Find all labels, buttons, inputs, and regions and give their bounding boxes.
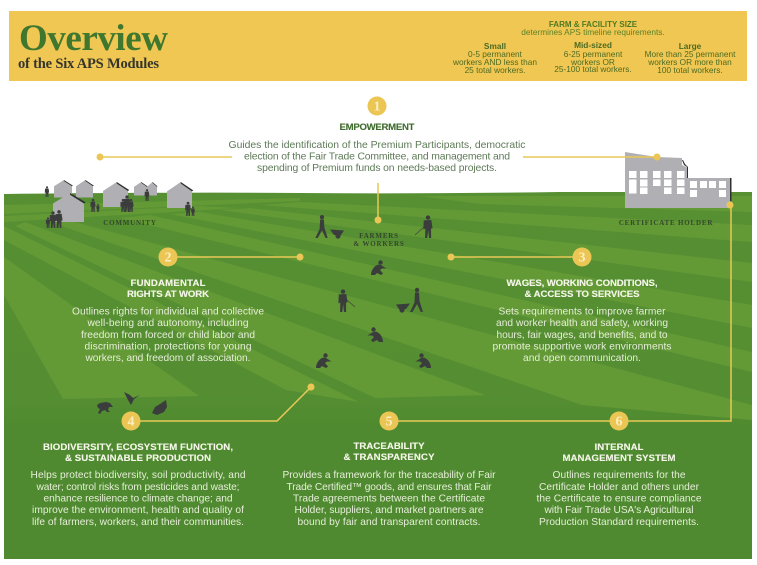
number badge 4: [122, 412, 140, 430]
heading 6: INTERNAL: [594, 442, 644, 453]
body 1: election of the Fair Trade Committee, and management and: [244, 152, 510, 162]
body 5: Trade Certified™ goods, and ensures that Fair: [286, 482, 492, 493]
number badge 2: [158, 248, 178, 266]
heading 2: RIGHTS AT WORK: [127, 289, 209, 300]
body 5: Trade agreements between the Certificate: [293, 494, 485, 504]
size: small: [452, 41, 537, 75]
heading 5: [344, 441, 435, 463]
heading 2: FUNDAMENTAL: [130, 278, 206, 289]
module 5: traceability: [282, 412, 496, 528]
size: small: 25 total workers.: [465, 65, 525, 75]
heading 3: [506, 278, 658, 300]
label: certificate holder: CERTIFICATE HOLDER: [619, 219, 713, 227]
body 4: improve the environment, health and quality of: [32, 505, 244, 516]
number badge 6: 6: [616, 414, 622, 430]
module 6: internal management: [536, 412, 702, 528]
heading 2: [127, 278, 209, 300]
body 3: promote supportive work environments: [492, 342, 672, 352]
body 6: with Fair Trade USA's Agricultural: [544, 505, 694, 516]
heading 1: EMPOWERMENT: [340, 122, 415, 133]
heading 4: & SUSTAINABLE PRODUCTION: [65, 453, 211, 464]
size: large: workers OR more than: [647, 57, 732, 67]
farm size heading: determines APS timeline requirements.: [521, 27, 665, 37]
body 4: Helps protect biodiversity, soil productivity, and: [30, 470, 246, 481]
body 4: water; control risks from pesticides and waste;: [36, 482, 240, 493]
heading 4: BIODIVERSITY, ECOSYSTEM FUNCTION,: [43, 442, 233, 453]
body 5: [282, 470, 496, 528]
label: community: COMMUNITY: [103, 219, 157, 227]
body 3: and worker health and safety, working: [496, 318, 668, 329]
heading 5: TRACEABILITY: [354, 441, 425, 452]
farm size heading: [521, 20, 665, 37]
body 3: hours, fair wages, and benefits, and to: [496, 330, 668, 341]
body 5: Holder, suppliers, and market partners are: [294, 505, 484, 516]
header banner: [9, 11, 747, 81]
number badge 1: [368, 96, 386, 116]
module 4: biodiversity: [30, 412, 246, 528]
icon: community houses: [45, 180, 195, 228]
label: farmers and workers: & WORKERS: [353, 240, 405, 248]
module 1: empowerment: [228, 96, 526, 174]
heading 6: [562, 442, 676, 464]
size: mid-sized: [554, 40, 632, 74]
size: mid-sized: workers OR: [570, 57, 615, 67]
title: Overview: [19, 18, 168, 59]
body 3: Sets requirements to improve farmer: [498, 306, 666, 318]
number badge 2: 2: [164, 250, 172, 266]
heading 3: WAGES, WORKING CONDITIONS,: [506, 278, 658, 289]
size: large: More than 25 permanent: [645, 49, 736, 59]
module 2: fundamental rights: [72, 248, 264, 364]
number badge 4: 4: [128, 414, 134, 430]
farm size heading: FARM & FACILITY SIZE: [549, 20, 638, 29]
icon: biodiversity animals: [97, 392, 167, 415]
body 2: [72, 306, 264, 364]
size: small: Small: [484, 41, 506, 51]
body 6: Certificate Holder and others under: [539, 482, 700, 493]
number badge 5: 5: [386, 414, 392, 430]
body 4: [30, 470, 246, 528]
body 5: bound by fair and transparent contracts.: [298, 517, 480, 528]
heading 6: MANAGEMENT SYSTEM: [562, 453, 676, 464]
body 3: [492, 306, 672, 364]
body 1: Guides the identification of the Premium Participants, democratic: [228, 140, 526, 151]
number badge 1: 1: [374, 100, 380, 114]
number badge 3: [572, 248, 592, 266]
field stripes: [4, 196, 752, 420]
body 3: and open communication.: [523, 353, 641, 364]
body 6: [536, 470, 702, 528]
body 6: Production Standard requirements.: [539, 517, 699, 528]
icon: farmers and workers: [315, 215, 433, 368]
body 5: Provides a framework for the traceability of Fair: [282, 470, 496, 481]
size: large: Large: [679, 41, 702, 51]
body 4: enhance resilience to climate change; and: [44, 494, 233, 504]
body 2: workers, and freedom of association.: [84, 353, 250, 364]
size: mid-sized: 6-25 permanent: [564, 49, 623, 59]
body 2: freedom from forced or child labor and: [81, 330, 255, 341]
number badge 6: [610, 412, 628, 430]
size: mid-sized: 25-100 total workers.: [554, 64, 632, 74]
size: small: workers AND less than: [452, 57, 537, 67]
size: large: 100 total workers.: [657, 65, 723, 75]
body 2: discrimination, protections for young: [84, 342, 252, 352]
icon: certificate holder building: [625, 152, 732, 208]
heading 5: & TRANSPARENCY: [344, 452, 435, 463]
body 1: [228, 140, 526, 174]
label: farmers and workers: FARMERS: [359, 232, 399, 240]
heading 4: [43, 442, 233, 464]
field background: [4, 192, 752, 559]
body 2: well-being and autonomy, including: [86, 318, 249, 329]
body 4: life of farmers, workers, and their communities.: [32, 517, 244, 528]
size: large: [645, 41, 736, 75]
heading 3: & ACCESS TO SERVICES: [524, 289, 640, 300]
body 6: Outlines requirements for the: [552, 470, 686, 481]
size: small: 0-5 permanent: [468, 49, 523, 59]
subtitle: of the Six APS Modules: [18, 56, 159, 72]
size: mid-sized: Mid-sized: [574, 40, 612, 50]
label: farmers and workers: [353, 232, 405, 248]
body 1: spending of Premium funds on needs-based projects.: [257, 163, 497, 174]
body 6: the Certificate to ensure compliance: [536, 494, 702, 504]
number badge 3: 3: [578, 250, 586, 266]
body 2: Outlines rights for individual and collective: [72, 306, 264, 318]
connector lines: [96, 154, 734, 421]
number badge 5: [380, 412, 398, 430]
module 3: wages: [492, 248, 672, 364]
